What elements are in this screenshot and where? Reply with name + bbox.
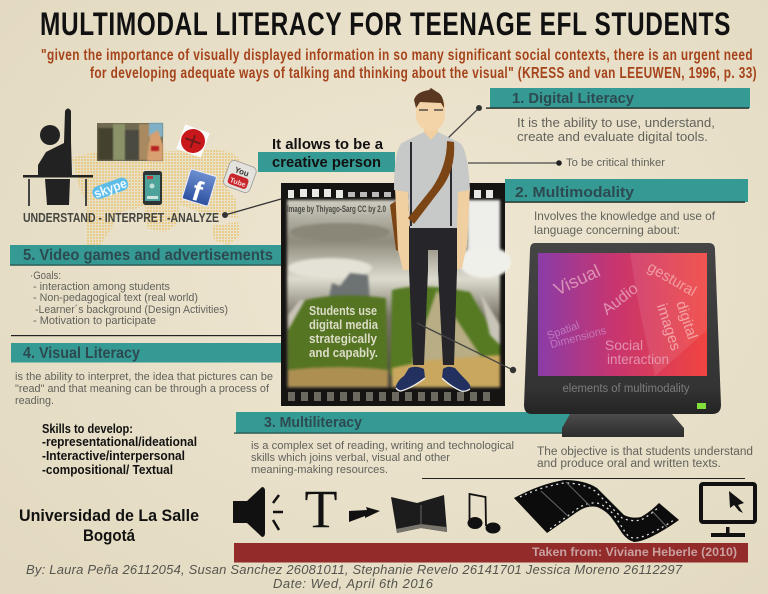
text: multimodality body: Involves the knowledge and use of	[534, 209, 716, 223]
illustration: monitor	[524, 243, 721, 437]
panel: multiliteracy: is a complex set of reading, writing and technological	[251, 440, 514, 452]
arrow: film pointer	[417, 323, 516, 373]
panel: digital literacy	[486, 88, 750, 144]
callout: to be critical thinker	[468, 157, 665, 169]
text: skills to develop: Skills to develop:	[42, 421, 133, 436]
illustration: monitor: digital	[672, 299, 701, 341]
text: goals list: - interaction among students	[33, 281, 170, 293]
suspenders	[411, 142, 451, 226]
book pages	[288, 295, 388, 375]
text: visual literacy body: "read" and that meaning can be through a process of	[15, 383, 270, 395]
icon: coca cola	[176, 124, 210, 158]
strap	[408, 141, 454, 224]
film sprockets	[288, 189, 493, 198]
icon: youtube: Tube	[229, 177, 246, 189]
panel: multiliteracy: meaning-making resources.	[251, 464, 388, 476]
icon: youtube: You	[233, 165, 250, 179]
panel: multiliteracy: skills which joins verbal, visual and other	[251, 452, 450, 464]
icon: speaker	[233, 487, 283, 537]
icon: music notes	[468, 494, 500, 534]
text: skills to develop	[42, 421, 197, 477]
castle	[328, 273, 370, 302]
panel: video games heading: 5. Video games and advertisements	[23, 247, 273, 264]
icon: film strip	[514, 480, 679, 542]
panel: digital literacy: It is the ability to use, understand,	[517, 115, 715, 130]
illustration: monitor: images	[653, 302, 684, 353]
panel: visual literacy heading	[11, 343, 282, 362]
icon: facebook	[181, 169, 217, 210]
hair	[414, 88, 444, 108]
text: multimodality body: language concerning about:	[534, 223, 680, 237]
text: objective	[537, 446, 753, 470]
illustration: monitor: gestural	[644, 259, 699, 300]
icon: skype: skype	[92, 175, 129, 201]
panel: multimodality heading: 2. Multimodality	[515, 184, 635, 201]
text: objective: and produce oral and written texts.	[537, 458, 721, 470]
panel: digital literacy: 1. Digital Literacy	[512, 90, 635, 107]
text: skills to develop: -compositional/ Textual	[42, 462, 173, 477]
bag	[390, 200, 410, 255]
illustration: monitor: interaction	[607, 351, 669, 367]
image caption	[309, 304, 379, 360]
text: university	[19, 506, 199, 545]
arrow: digital literacy pointer	[446, 105, 482, 140]
text: skills to develop: -Interactive/interpersonal	[42, 448, 185, 463]
text: university: Universidad de La Salle	[19, 506, 199, 525]
text: university: Bogotá	[83, 526, 135, 545]
text: visual literacy body	[15, 371, 273, 407]
text: skills to develop: -representational/ideational	[42, 434, 197, 449]
illustration: monitor: elements of multimodality	[562, 383, 690, 395]
text: goals list	[30, 270, 228, 327]
illustration: monitor: Audio	[599, 280, 642, 319]
map: dotted world background	[72, 150, 240, 245]
text: goals list: - Motivation to participate	[33, 315, 156, 327]
text: objective: The objective is that students understand	[537, 446, 753, 458]
credit bar: Taken from: Viviane Heberle (2010)	[532, 545, 737, 559]
callout: to be critical thinker: To be critical thinker	[566, 157, 665, 169]
panel: multiliteracy	[234, 412, 576, 476]
illustration: monitor: Visual	[551, 261, 603, 299]
image caption: and capably.	[309, 346, 378, 360]
text: goals list: - Non-pedagogical text (real world)	[33, 292, 198, 304]
icon: letter T: T	[304, 479, 338, 539]
neck	[424, 122, 438, 140]
icon: student raising hand	[23, 108, 93, 206]
icon: phone	[143, 171, 162, 205]
illustration: monitor: Social	[605, 337, 643, 353]
illustration: monitor: Spatial	[545, 320, 581, 342]
head	[416, 102, 445, 131]
illustration: monitor: Dimensions	[549, 325, 608, 351]
text: goals list: -Learner´s background (Design Activities)	[35, 304, 228, 316]
text: goals list: ·Goals:	[30, 270, 61, 282]
credit bar	[234, 543, 748, 562]
text: multimodality body	[534, 209, 716, 237]
text: authors: Date: Wed, April 6th 2016	[273, 576, 434, 591]
icon: book	[391, 495, 447, 533]
panel: film image	[281, 183, 511, 406]
image caption: digital media	[309, 318, 379, 332]
illustration: student figure	[390, 88, 470, 391]
text: it allows to be a creative person	[258, 136, 395, 172]
text: it allows to be a creative person: creative person	[272, 154, 381, 171]
text: authors	[26, 562, 683, 591]
text: authors: By: Laura Peña 26112054, Susan Sanchez 26081011, Stephanie Revelo 26141701 Jessica Moreno 26112297	[26, 562, 683, 577]
sky photo	[287, 200, 511, 388]
arms	[395, 188, 411, 270]
image caption: strategically	[309, 332, 377, 346]
text: visual literacy body: reading.	[15, 395, 54, 407]
icon: youtube	[222, 159, 258, 194]
trousers	[409, 226, 457, 365]
text: it allows to be a creative person: It allows to be a	[272, 136, 384, 153]
quote	[41, 47, 757, 82]
icon: arrow	[349, 507, 380, 522]
arrow: understand pointer	[222, 199, 281, 218]
icon: facebook: f	[188, 175, 207, 208]
icon: screen with cursor	[701, 484, 755, 537]
panel: multimodality heading	[505, 179, 748, 203]
shirt	[394, 132, 470, 228]
text: understand interpret analyze: UNDERSTAND - INTERPRET -ANALYZE	[23, 210, 219, 225]
shoes	[396, 367, 425, 391]
panel: visual literacy heading: 4. Visual Literacy	[23, 345, 140, 362]
panel: multiliteracy: 3. Multiliteracy	[264, 414, 363, 431]
panel: digital literacy: create and evaluate digital tools.	[517, 129, 708, 144]
image caption: Students use	[309, 304, 377, 318]
image: video game collage	[97, 123, 163, 161]
glasses	[419, 109, 443, 111]
image credit: Image by Thiyago-Sarg CC by 2.0	[287, 204, 386, 215]
text: visual literacy body: is the ability to interpret, the idea that pictures can be	[15, 371, 273, 383]
